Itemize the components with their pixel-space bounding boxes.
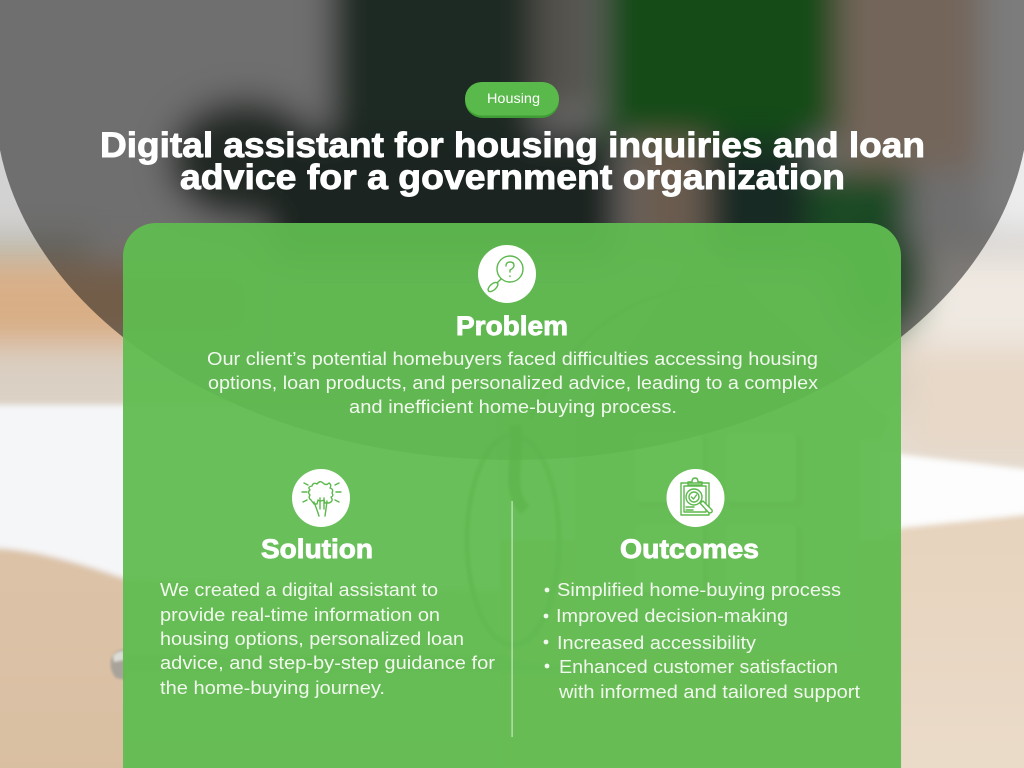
outcomes bullet list: [544, 580, 860, 702]
problem description: and inefficient home-buying process.: [349, 397, 677, 417]
heading: Outcomes: Outcomes: [620, 534, 759, 564]
panel: outcomes: [544, 469, 860, 702]
title: [100, 126, 925, 197]
icon: magnifier with question mark: [478, 245, 536, 303]
category pill: Housing: Housing: [487, 91, 540, 106]
solution description: [160, 580, 495, 698]
outcomes bullet list: Enhanced customer satisfaction: [559, 657, 838, 677]
dark semi-circle overlay: [0, 0, 1024, 460]
outcomes bullet list: Simplified home-buying process: [557, 580, 841, 600]
outcomes bullet list: with informed and tailored support: [558, 682, 860, 702]
icon: hand holding puzzle piece: [292, 469, 350, 527]
solution description: advice, and step-by-step guidance for: [160, 653, 495, 673]
solution description: provide real-time information on: [160, 605, 440, 625]
green content panel: [123, 223, 901, 768]
problem description: options, loan products, and personalized advice, leading to a complex: [208, 373, 818, 393]
icon: clipboard with magnifier: [666, 469, 724, 527]
title: advice for a government organization: [180, 158, 845, 197]
category pill: Housing: [465, 82, 559, 118]
panel: solution: [160, 469, 495, 698]
panel: problem: [207, 245, 818, 417]
house and key ghost behind panel: [510, 460, 526, 511]
solution description: We created a digital assistant to: [160, 580, 438, 600]
outcomes bullet list: Improved decision-making: [556, 606, 788, 626]
divider between solution and outcomes: [512, 501, 513, 737]
solution description: the home-buying journey.: [160, 678, 385, 698]
problem description: [207, 349, 818, 417]
heading: Solution: Solution: [261, 534, 373, 564]
metal key tip: [111, 649, 126, 680]
outcomes bullet list: Increased accessibility: [557, 633, 756, 653]
heading: Problem: Problem: [456, 311, 568, 341]
problem description: Our client’s potential homebuyers faced difficulties accessing housing: [207, 349, 818, 369]
title: Digital assistant for housing inquiries and loan: [100, 126, 925, 165]
solution description: housing options, personalized loan: [160, 629, 464, 649]
